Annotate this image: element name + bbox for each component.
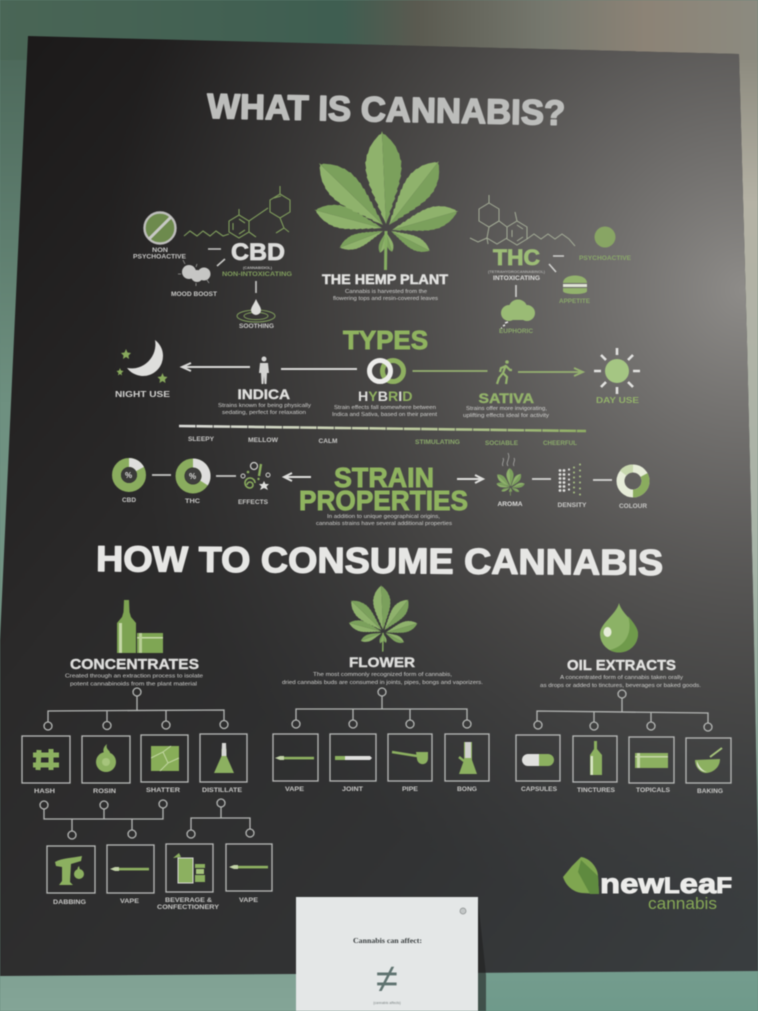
item: distillate: DISTILLATE (202, 787, 243, 794)
description: concentrates (65, 674, 203, 688)
item: beverage and confectionery (157, 844, 220, 911)
heading: strain properties (299, 462, 468, 516)
logo: newleaf cannabis: new LeaF (600, 868, 732, 899)
icon: sun (594, 348, 640, 394)
effect labels: SLEEPY (188, 436, 215, 443)
label: density: DENSITY (558, 502, 587, 509)
heading: strain properties: STRAIN (334, 462, 434, 493)
item: vape (273, 734, 318, 793)
item: pipe: PIPE (402, 786, 419, 793)
icon: moon and stars (116, 340, 168, 383)
arrow: to day use (518, 368, 583, 376)
CBD molecule (184, 186, 290, 238)
description: strain properties (316, 514, 452, 527)
label: appetite: APPETITE (559, 298, 591, 305)
icon: runner (497, 360, 512, 384)
item: capsules: CAPSULES (521, 786, 558, 793)
effect labels: CHEERFUL (543, 440, 577, 447)
section: the hemp plant: THE HEMP PLANT (322, 271, 448, 287)
item: capsules (516, 735, 560, 793)
label: effects: EFFECTS (238, 499, 269, 506)
logo: newleaf cannabis (563, 857, 732, 913)
description: concentrates: potent cannabinoids from the plant material (70, 682, 197, 688)
label: non-psychoactive: NON (152, 247, 168, 254)
heading: concentrates: CONCENTRATES (70, 656, 199, 673)
item: vape (107, 845, 154, 905)
item: beverage and confectionery: BEVERAGE & (165, 897, 212, 904)
heading: how to consume cannabis: HOW TO CONSUME CANNABIS (96, 538, 663, 583)
icon: non-psychoactive (144, 212, 176, 244)
block: indica: INDICA (238, 386, 290, 402)
block: sativa: SATIVA (478, 390, 534, 406)
section: THC (470, 195, 632, 335)
icon: mood boost cloud (178, 260, 210, 286)
item: rosin (82, 736, 130, 795)
icon: soothing drop (237, 299, 275, 322)
effect labels (188, 436, 577, 447)
icon: flower leaf (346, 585, 419, 652)
label: tetrahydrocannabinol: (TETRAHYDROCANNABINOL) (488, 270, 545, 274)
THC molecule (470, 195, 575, 246)
label: soothing: SOOTHING (239, 323, 274, 330)
panel: concentrates (22, 600, 272, 911)
label: non-intoxicating: NON-INTOXICATING (222, 271, 292, 278)
description: strain properties: cannabis strains have several additional properties (316, 521, 452, 527)
block: hybrid (332, 388, 438, 418)
icon: aroma leaf (495, 453, 526, 496)
item: rosin: ROSIN (93, 788, 116, 795)
item: hash: HASH (34, 788, 55, 795)
item: pipe (388, 734, 432, 793)
block: indica: sedating, perfect for relaxation (222, 410, 306, 416)
tree connector: oil extracts (534, 690, 712, 731)
description: oil extracts: A concentrated form of cannabis taken orally (560, 675, 683, 681)
item: distillate (200, 734, 247, 794)
hemp leaf illustration (308, 130, 461, 270)
block: sativa: Strains offer more invigorating, (466, 406, 547, 412)
panel: oil extracts (516, 603, 731, 795)
THC heading: THC (493, 245, 540, 270)
item: vape: VAPE (239, 897, 259, 904)
heading: oil extracts: OIL EXTRACTS (567, 657, 676, 674)
item: vape: VAPE (285, 786, 305, 793)
icon: density dots (559, 464, 581, 496)
item: baking: BAKING (697, 788, 723, 795)
tree connector: hash to dabbing and vape (40, 800, 167, 839)
section: the hemp plant (322, 271, 448, 302)
label: non-psychoactive: PSYCHOACTIVE (133, 254, 187, 260)
description: concentrates: Created through an extraction process to isolate (65, 674, 203, 680)
description: oil extracts (540, 675, 701, 689)
notice card: Cannabis can affect: (353, 936, 422, 945)
item: topicals (629, 737, 674, 794)
notice card: (cannabis affects) (373, 1001, 401, 1005)
item: dabbing: DABBING (53, 899, 86, 906)
section: the hemp plant: Cannabis is harvested from the (345, 289, 427, 295)
description: flower: The most commonly recognized form of cannabis, (313, 672, 452, 678)
label: euphoric: EUPHORIC (499, 328, 533, 335)
item: hash (22, 736, 70, 795)
label: colour: COLOUR (619, 503, 647, 510)
section: types row (115, 340, 640, 447)
chart: THC donut: % (189, 472, 196, 481)
icon: colour ring (620, 468, 646, 494)
arrow: to aroma (457, 475, 483, 483)
icon: appetite burger (563, 276, 587, 294)
block: hybrid: HYBRID (358, 388, 412, 404)
label: cannabidiol: (CANNABIDIOL) (243, 266, 272, 270)
effect labels: CALM (318, 438, 338, 445)
icon: oil drop (600, 603, 638, 652)
block: hybrid: Indica and Sativa, based on their parent (332, 412, 438, 418)
label: non-psychoactive (133, 247, 187, 260)
item: baking (686, 738, 731, 795)
block: hybrid: Strain effects fall somewhere between (334, 405, 436, 411)
label: mood boost: MOOD BOOST (171, 291, 217, 298)
label: day use: DAY USE (596, 395, 639, 405)
heading: flower: FLOWER (349, 654, 415, 670)
arrow: to effects (284, 473, 311, 481)
logo: newleaf cannabis: cannabis (648, 894, 717, 913)
tree connector: concentrates (44, 688, 228, 730)
section: the hemp plant: flowering tops and resin-covered leaves (333, 296, 438, 302)
chart: THC donut (180, 463, 206, 489)
section: strain properties (116, 453, 647, 527)
tree connector: flower (292, 688, 471, 728)
effect spectrum bar (179, 426, 586, 431)
item: bong (445, 734, 489, 793)
icon: effects (241, 462, 270, 490)
notice card: ≠ (376, 957, 398, 1001)
section: CBD (133, 186, 292, 330)
icon: human figure (259, 356, 269, 384)
panel: flower (273, 585, 489, 793)
effect labels: STIMULATING (415, 439, 460, 446)
title: what is cannabis: WHAT IS CANNABIS? (207, 87, 566, 133)
icon: hybrid rings (370, 360, 404, 382)
block: indica (218, 386, 311, 416)
description: strain properties: In addition to unique geographical origins, (327, 514, 440, 520)
icon: bottle and jar (117, 600, 163, 653)
label: CBD: CBD (122, 497, 136, 504)
icon: euphoric cloud (501, 300, 535, 328)
item: bong: BONG (457, 786, 477, 793)
item: shatter: SHATTER (146, 787, 180, 794)
item: joint (330, 734, 376, 793)
label: intoxicating: INTOXICATING (493, 275, 540, 282)
block: sativa (463, 390, 549, 419)
arrow: to night use (182, 363, 250, 371)
chart: CBD donut: % (125, 471, 132, 480)
label: psychoactive: PSYCHOACTIVE (579, 255, 632, 262)
item: shatter (141, 735, 188, 794)
block: sativa: uplifting effects ideal for activity (463, 413, 549, 419)
notice card (296, 897, 486, 1011)
label: aroma: AROMA (498, 501, 523, 508)
item: dabbing (47, 846, 95, 906)
block: indica: Strains known for being physically (218, 403, 311, 409)
item: tinctures: TINCTURES (577, 787, 616, 794)
icon: psychoactive (594, 226, 616, 248)
item: topicals: TOPICALS (636, 787, 671, 794)
CBD heading: CBD (231, 239, 285, 266)
description: flower (282, 672, 483, 686)
label: night use: NIGHT USE (115, 389, 170, 399)
description: oil extracts: as drops or added to tinctures, beverages or baked goods. (540, 683, 701, 689)
item: tinctures (573, 736, 617, 794)
item: joint: JOINT (342, 786, 363, 793)
label: THC: THC (185, 498, 200, 505)
item: beverage and confectionery: CONFECTIONERY (157, 904, 220, 911)
effect labels: SOCIABLE (485, 440, 519, 447)
item: vape: VAPE (120, 898, 140, 905)
heading: strain properties: PROPERTIES (299, 485, 468, 516)
effect labels: MELLOW (248, 437, 279, 444)
description: flower: dried cannabis buds are consumed in joints, pipes, bongs and vaporizers. (282, 680, 483, 686)
heading: types: TYPES (343, 325, 428, 355)
tree connector: distillate to beverage and vape (187, 799, 254, 838)
chart: CBD donut (116, 462, 142, 488)
item: vape (226, 844, 272, 904)
